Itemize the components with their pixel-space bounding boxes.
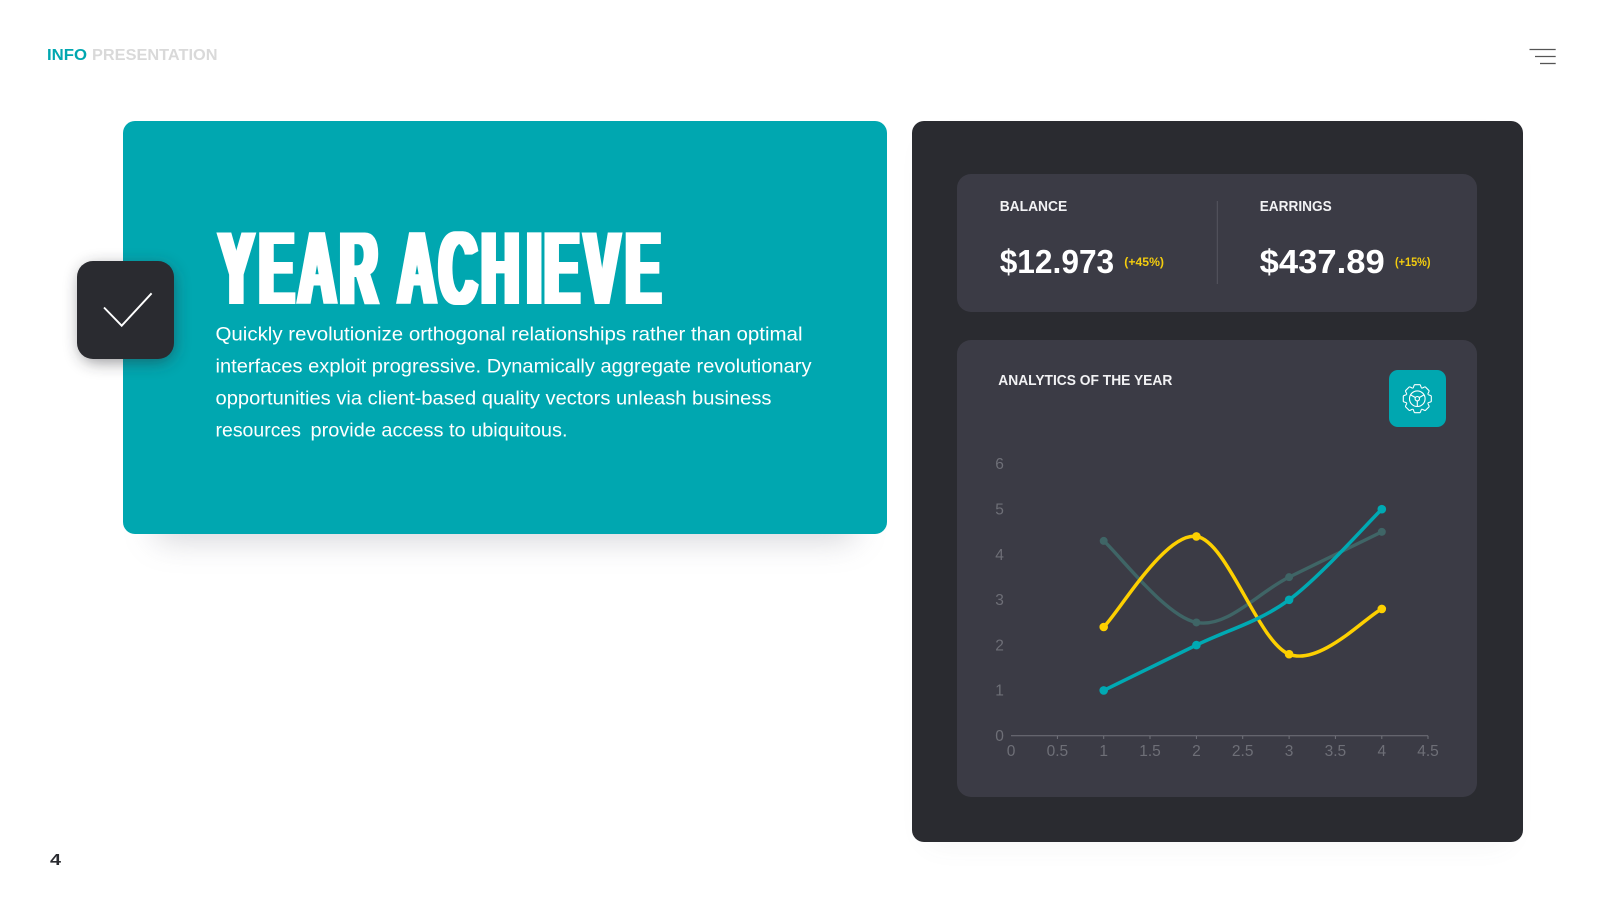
x axis: 3 <box>1285 743 1293 760</box>
description: opportunities via client-based quality vectors unleash business <box>216 388 772 410</box>
series: yellow <box>1099 532 1386 658</box>
x axis: 0 <box>1007 743 1016 760</box>
analytics heading: ANALYTICS OF THE YEAR <box>998 373 1173 389</box>
stat: balance: (+45%) <box>1124 255 1164 269</box>
stat: balance: BALANCE <box>1000 199 1068 215</box>
y axis labels: 5 <box>995 502 1004 518</box>
stat: balance <box>1000 199 1164 281</box>
card: balance and earnings <box>957 174 1477 312</box>
x axis <box>1007 736 1439 760</box>
icon: menu <box>1530 50 1556 64</box>
card: analytics <box>957 340 1477 797</box>
description: resources <box>216 420 301 442</box>
series: teal <box>1099 505 1386 695</box>
x axis: 1 <box>1099 743 1108 760</box>
y axis labels: 1 <box>995 682 1004 700</box>
stat: earnings: $437.89 <box>1260 244 1385 281</box>
description <box>216 324 812 442</box>
y axis labels: 3 <box>995 592 1004 609</box>
stat: earnings: EARRINGS <box>1260 199 1332 215</box>
header brand: PRESENTATION <box>92 47 218 64</box>
stat: earnings <box>1260 199 1430 281</box>
dashboard background <box>912 121 1523 842</box>
y axis labels: 2 <box>995 638 1004 654</box>
title: YEAR ACHIEVE <box>219 212 660 327</box>
description: interfaces exploit progressive. Dynamically aggregate revolutionary <box>216 356 812 378</box>
panel: year achieve <box>123 121 887 534</box>
x axis: 2.5 <box>1232 743 1253 760</box>
panel: dashboard <box>912 121 1523 842</box>
description: provide access to ubiquitous. <box>310 420 568 442</box>
description: Quickly revolutionize orthogonal relationships rather than optimal <box>216 324 802 346</box>
x axis: 1.5 <box>1139 743 1161 760</box>
x axis: 2 <box>1192 743 1201 760</box>
icon: check badge <box>77 261 174 359</box>
stat: earnings: (+15%) <box>1395 255 1430 269</box>
x axis: 4 <box>1377 743 1386 760</box>
y axis labels: 6 <box>995 456 1004 473</box>
stat: balance: $12.973 <box>1000 244 1114 281</box>
y axis labels <box>995 456 1004 745</box>
y axis labels: 4 <box>995 547 1004 564</box>
y axis labels: 0 <box>995 728 1004 745</box>
x axis: 4.5 <box>1417 743 1439 760</box>
panel background <box>123 121 887 534</box>
line chart <box>995 456 1439 760</box>
x axis: 3.5 <box>1325 743 1346 760</box>
icon: gear wheel <box>1389 370 1446 427</box>
header brand: INFO <box>47 47 87 64</box>
page number: 4 <box>50 852 61 869</box>
x axis: 0.5 <box>1047 743 1068 760</box>
series: grey teal <box>1100 528 1386 626</box>
